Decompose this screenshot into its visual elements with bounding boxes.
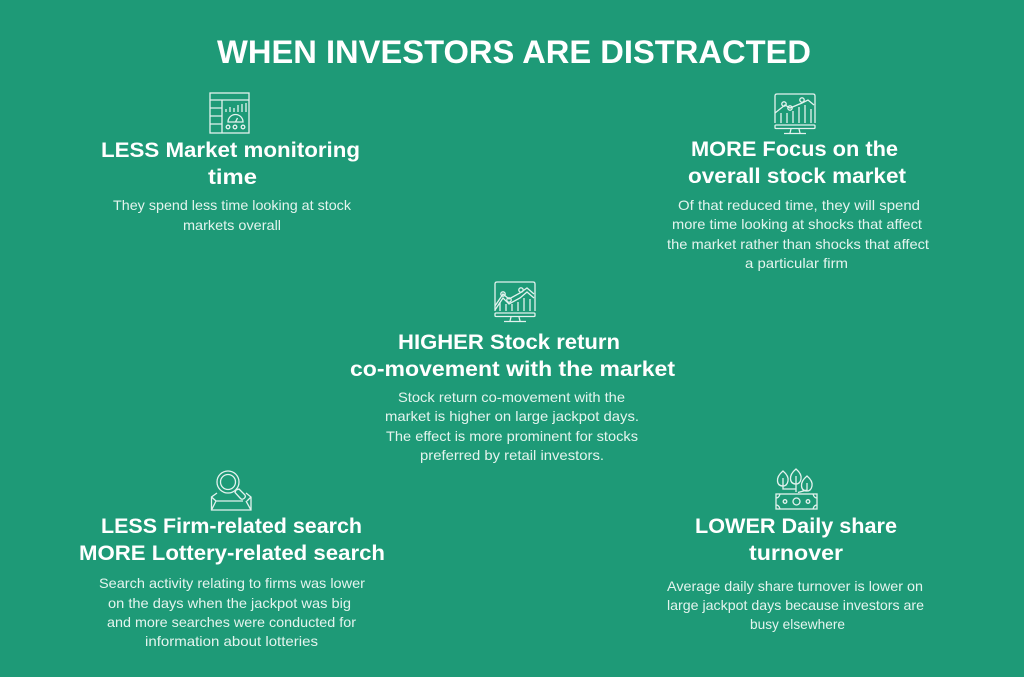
text block: Stock return co-movement with the [398, 389, 625, 405]
text block: market is higher on large jackpot days. [385, 408, 639, 424]
text block [99, 575, 365, 649]
text block: a particular firm [745, 255, 848, 271]
icon: monitor with line chart [775, 94, 815, 134]
text block: They spend less time looking at stock [113, 197, 352, 213]
panel: less market monitoring time [101, 93, 360, 233]
heading [688, 137, 906, 188]
text block [667, 578, 924, 632]
text block: busy elsewhere [750, 616, 845, 632]
text block: large jackpot days because investors are [667, 597, 924, 613]
icon: plants growing from banknote [776, 469, 817, 509]
text block: preferred by retail investors. [420, 447, 604, 463]
heading [101, 138, 360, 189]
heading: overall stock market [688, 164, 906, 188]
heading [695, 514, 897, 565]
icon: dashboard [210, 93, 249, 133]
panel: more focus on the overall stock market [667, 94, 929, 271]
heading: LOWER Daily share [695, 514, 897, 538]
text block: Of that reduced time, they will spend [678, 197, 920, 213]
text block: the market rather than shocks that affect [667, 236, 929, 252]
heading [79, 514, 385, 565]
heading: LESS Firm-related search [101, 514, 362, 538]
text block: markets overall [183, 217, 281, 233]
heading: co-movement with the market [350, 357, 675, 381]
heading: HIGHER Stock return [398, 330, 620, 354]
heading: MORE Lottery-related search [79, 541, 385, 565]
heading: LESS Market monitoring [101, 138, 360, 162]
text block [667, 197, 929, 271]
text block [113, 197, 352, 233]
text block: on the days when the jackpot was big [108, 595, 351, 611]
heading: turnover [749, 541, 844, 565]
icon: magnifier over inbox [212, 471, 251, 510]
text block: The effect is more prominent for stocks [386, 428, 638, 444]
title: WHEN INVESTORS ARE DISTRACTED [217, 34, 811, 70]
text block: more time looking at shocks that affect [672, 216, 922, 232]
text block: information about lotteries [145, 633, 318, 649]
heading: time [208, 165, 257, 189]
text block: and more searches were conducted for [107, 614, 356, 630]
text block: Average daily share turnover is lower on [667, 578, 923, 594]
text block [385, 389, 639, 463]
icon: monitor with rising chart [495, 282, 535, 322]
heading: MORE Focus on the [691, 137, 898, 161]
panel: higher stock return co-movement [350, 282, 675, 463]
panel: less firm-related search, more lottery-related search [79, 471, 385, 649]
panel: lower daily share turnover [667, 469, 924, 632]
heading [350, 330, 675, 381]
text block: Search activity relating to firms was lower [99, 575, 365, 591]
